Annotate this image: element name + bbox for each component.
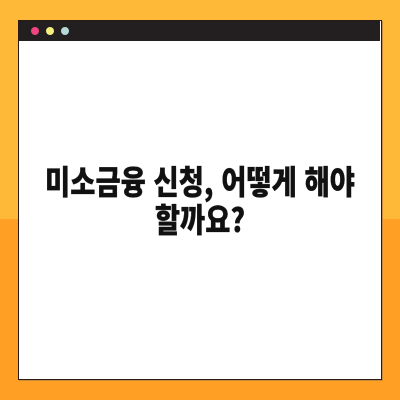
title (45, 156, 355, 242)
background: yellow upper band (0, 0, 400, 219)
title: 할까요? (155, 194, 245, 242)
title: 미소금융 신청, 어떻게 해야 (45, 156, 355, 204)
icon: pale blue window dot (60, 27, 68, 35)
icon: yellow window dot (46, 27, 54, 35)
icon: pink window dot (30, 27, 38, 35)
window title bar (19, 21, 380, 41)
